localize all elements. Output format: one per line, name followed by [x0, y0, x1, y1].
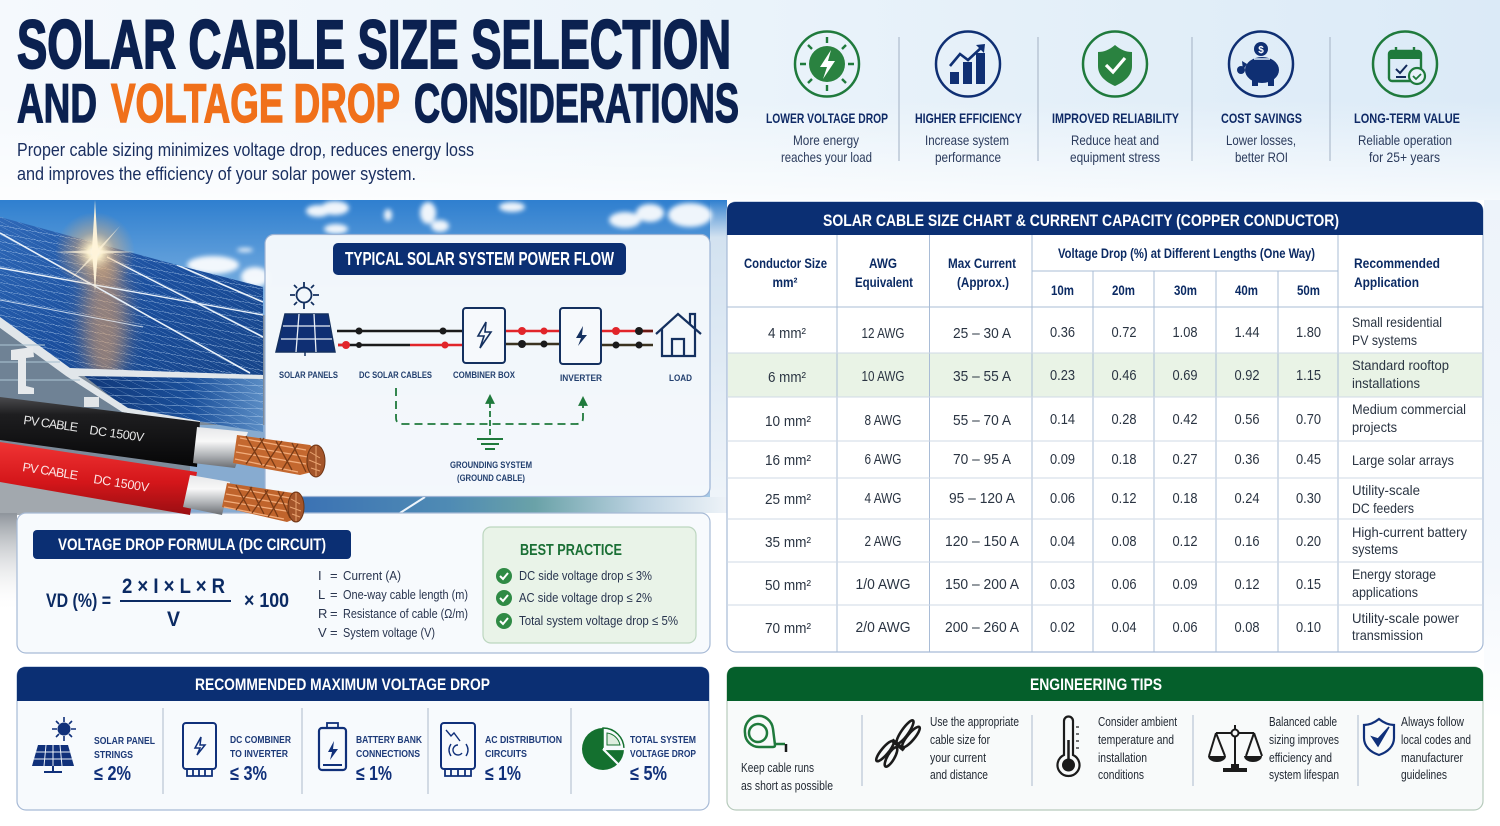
- column headers: (Approx.): [957, 275, 1009, 290]
- benefit: long-term value: LONG-TERM VALUE: [1354, 110, 1460, 126]
- tip: ambient temperature: installation: [1098, 751, 1147, 765]
- benefit: cost savings: better ROI: [1235, 149, 1288, 165]
- best practice box: BEST PRACTICE: [520, 542, 622, 559]
- row: 10 mm²: 0.28: [1112, 412, 1136, 428]
- row: 70 mm²: 0.08: [1234, 620, 1260, 636]
- item: solar panel strings: STRINGS: [94, 749, 133, 761]
- row: 4 mm²: PV systems: [1352, 332, 1417, 348]
- item: dc combiner to inverter: [183, 723, 291, 785]
- item: battery bank connections: CONNECTIONS: [356, 748, 420, 760]
- tip: balanced scales: sizing improves: [1269, 733, 1339, 747]
- label: grounding system: (GROUND CABLE): [457, 473, 525, 484]
- tip: balanced scales: Balanced cable: [1269, 715, 1337, 729]
- formula: 2 × I × L × R: [122, 575, 225, 598]
- cable label: black: DC 1500V: [89, 423, 146, 445]
- row: 16 mm²: 0.45: [1296, 452, 1321, 468]
- row: 35 mm²: 0.16: [1234, 534, 1260, 550]
- row: 70 mm²: 0.10: [1296, 620, 1321, 636]
- row: 4 mm²: Small residential: [1352, 314, 1442, 330]
- photo: solar panels and sky: [0, 200, 727, 613]
- row: 35 mm²: [765, 524, 1467, 557]
- heading: engineering tips: ENGINEERING TIPS: [1030, 675, 1162, 694]
- subtitle: Proper cable sizing minimizes voltage drop, reduces energy loss: [17, 139, 474, 160]
- row: 16 mm²: [765, 452, 1454, 469]
- item: solar panel strings: SOLAR PANEL: [94, 735, 155, 747]
- row: 25 mm²: 0.06: [1050, 491, 1075, 507]
- formula: × 100: [244, 590, 289, 612]
- column headers: Equivalent: [855, 275, 913, 290]
- tip: ambient temperature: [1058, 715, 1177, 782]
- row: 4 mm²: 12 AWG: [862, 326, 904, 342]
- tip: appropriate cable size: your current: [930, 751, 986, 765]
- item: ac distribution circuits: AC DISTRIBUTION: [485, 734, 562, 746]
- item: solar panel strings: ≤ 2%: [94, 763, 131, 785]
- item: solar panel strings: [32, 717, 155, 785]
- row: 10 mm²: Medium commercial: [1352, 401, 1466, 417]
- panel: recommended maximum voltage drop: [17, 667, 709, 810]
- row: 25 mm²: 0.24: [1234, 491, 1260, 507]
- row: 6 mm²: 10 AWG: [862, 369, 904, 385]
- formula legend: Current (A): [343, 568, 401, 583]
- row: 10 mm²: 8 AWG: [864, 413, 902, 429]
- panel: typical solar system power flow: [265, 234, 710, 496]
- row: 25 mm²: 0.18: [1172, 491, 1198, 507]
- icon: house load: LOAD: [669, 373, 692, 384]
- row: 10 mm²: projects: [1352, 419, 1397, 435]
- row: 35 mm²: systems: [1352, 541, 1398, 557]
- row: 6 mm²: 6 mm²: [768, 370, 806, 386]
- column headers: [744, 246, 1440, 298]
- row: 35 mm²: 2 AWG: [864, 534, 902, 550]
- benefit: improved reliability: [1052, 32, 1180, 165]
- formula legend: One-way cable length (m): [343, 587, 468, 602]
- benefit: cost savings: Lower losses,: [1226, 132, 1296, 148]
- tip: codes and guidelines: local codes and: [1401, 733, 1471, 747]
- item: battery bank connections: [319, 723, 422, 785]
- cable label: black: [23, 413, 146, 445]
- row: 6 mm²: [768, 357, 1449, 391]
- heading: formula: VOLTAGE DROP FORMULA (DC CIRCUIT): [58, 535, 326, 554]
- row: 70 mm²: 0.04: [1112, 620, 1136, 636]
- benefit: lower voltage drop: reaches your load: [781, 149, 872, 165]
- best practice box: [483, 527, 696, 643]
- row: 25 mm²: 0.12: [1112, 491, 1136, 507]
- subtitle: and improves the efficiency of your solar power system.: [17, 163, 416, 184]
- icon: inverter: INVERTER: [560, 373, 602, 384]
- label: SOLAR PANELS: [279, 370, 338, 381]
- item: total system voltage drop: [582, 728, 696, 785]
- benefit: higher efficiency: HIGHER EFFICIENCY: [915, 110, 1022, 126]
- tip: short cable runs: Keep cable runs: [741, 761, 814, 775]
- benefit: lower voltage drop: [766, 32, 888, 165]
- heading: power flow: TYPICAL SOLAR SYSTEM POWER FLOW: [345, 249, 614, 269]
- column headers: mm²: [772, 275, 798, 290]
- column headers: AWG: [869, 256, 897, 271]
- formula legend: System voltage (V): [343, 625, 435, 640]
- title: SOLAR CABLE SIZE SELECTION: [17, 6, 731, 83]
- chart header: SOLAR CABLE SIZE CHART & CURRENT CAPACITY (COPPER CONDUCTOR): [823, 211, 1339, 230]
- row: 25 mm²: DC feeders: [1352, 500, 1414, 516]
- title: [17, 6, 739, 134]
- cable label: red: [22, 460, 151, 495]
- item: total system voltage drop: ≤ 5%: [630, 763, 667, 785]
- benefit: long-term value: for 25+ years: [1369, 149, 1440, 165]
- row: 4 mm²: 1.08: [1172, 325, 1198, 341]
- cable label: red: DC 1500V: [93, 472, 151, 495]
- row: 16 mm²: 0.09: [1050, 452, 1075, 468]
- benefit: higher efficiency: performance: [935, 149, 1001, 165]
- row: 4 mm²: 1.80: [1296, 325, 1321, 341]
- tip: appropriate cable size: and distance: [930, 768, 988, 782]
- row: 50 mm²: [765, 566, 1436, 600]
- row: 70 mm²: 2/0 AWG: [856, 620, 910, 636]
- grey area below cables: [0, 480, 195, 613]
- panel: engineering tips: [727, 667, 1483, 810]
- tip: short cable runs: [741, 716, 833, 793]
- heading: formula: [33, 530, 351, 559]
- wires: [337, 327, 653, 349]
- row: 10 mm²: 10 mm²: [765, 414, 811, 430]
- row: 16 mm²: 6 AWG: [864, 452, 902, 468]
- column headers: Recommended: [1354, 256, 1440, 271]
- row: 10 mm²: 0.70: [1296, 412, 1321, 428]
- formula: V: [167, 608, 180, 631]
- row: 50 mm²: 0.12: [1234, 577, 1260, 593]
- row: 70 mm²: 0.06: [1172, 620, 1198, 636]
- item: dc combiner to inverter: DC COMBINER: [230, 734, 291, 746]
- benefit: improved reliability: Reduce heat and: [1071, 132, 1159, 148]
- row: 25 mm²: [765, 482, 1420, 516]
- item: total system voltage drop: VOLTAGE DROP: [630, 748, 696, 760]
- row: 6 mm²: 0.69: [1172, 368, 1198, 384]
- row: 4 mm²: 4 mm²: [768, 326, 806, 342]
- label: dc solar cables: DC SOLAR CABLES: [359, 370, 432, 381]
- column headers: Conductor Size: [744, 256, 827, 271]
- row: 25 mm²: 0.30: [1296, 491, 1321, 507]
- best practice box: DC side voltage drop ≤ 3%: [519, 568, 652, 583]
- item: ac distribution circuits: [441, 723, 562, 785]
- row: 50 mm²: 0.09: [1172, 577, 1198, 593]
- tip: appropriate cable size: [874, 715, 1019, 782]
- row: 50 mm²: 50 mm²: [765, 578, 811, 594]
- best practice box: AC side voltage drop ≤ 2%: [519, 590, 652, 605]
- heading: recommended: RECOMMENDED MAXIMUM VOLTAGE DROP: [195, 675, 490, 694]
- row: 4 mm²: [768, 314, 1442, 348]
- row: 35 mm²: High-current battery: [1352, 524, 1467, 540]
- benefit: higher efficiency: Increase system: [925, 132, 1009, 148]
- column headers: 10m: [1051, 283, 1074, 298]
- row: 70 mm²: [765, 610, 1459, 643]
- heading: power flow: [333, 243, 626, 275]
- label: grounding system: GROUNDING SYSTEM: [450, 460, 532, 471]
- item: battery bank connections: ≤ 1%: [356, 763, 392, 785]
- row: 70 mm²: Utility-scale power: [1352, 610, 1459, 626]
- item: ac distribution circuits: CIRCUITS: [485, 748, 527, 760]
- icon: combiner box: COMBINER BOX: [453, 370, 516, 381]
- row: 6 mm²: 0.92: [1234, 368, 1260, 384]
- sky with clouds: [0, 200, 727, 513]
- heading: engineering tips: [727, 667, 1483, 701]
- red PV cable: [0, 442, 304, 522]
- row: 35 mm²: 120 – 150 A: [945, 534, 1019, 550]
- item: total system voltage drop: TOTAL SYSTEM: [630, 734, 696, 746]
- column headers: 30m: [1174, 283, 1197, 298]
- row: 6 mm²: 0.23: [1050, 368, 1075, 384]
- row: 10 mm²: 0.14: [1050, 412, 1075, 428]
- formula legend: =: [330, 568, 338, 583]
- benefit: improved reliability: equipment stress: [1070, 149, 1160, 165]
- panel: cable size chart: [727, 202, 1483, 652]
- item: dc combiner to inverter: TO INVERTER: [230, 748, 288, 760]
- row: 50 mm²: Energy storage: [1352, 566, 1436, 582]
- heading: recommended: [17, 667, 709, 701]
- benefit: cost savings: COST SAVINGS: [1221, 110, 1302, 126]
- item: battery bank connections: BATTERY BANK: [356, 734, 422, 746]
- row: 70 mm²: transmission: [1352, 627, 1423, 643]
- formula legend: [318, 568, 468, 640]
- row: 35 mm²: 0.20: [1296, 534, 1321, 550]
- item: dc combiner to inverter: ≤ 3%: [230, 763, 267, 785]
- formula legend: V: [318, 625, 327, 640]
- icon: house load: [656, 314, 701, 384]
- black PV cable: [0, 397, 325, 477]
- row: 70 mm²: 200 – 260 A: [945, 620, 1019, 636]
- tip: appropriate cable size: cable size for: [930, 733, 990, 747]
- column headers: 40m: [1235, 283, 1258, 298]
- grounding lines: [396, 388, 586, 449]
- benefit: lower voltage drop: LOWER VOLTAGE DROP: [766, 110, 888, 126]
- row: 25 mm²: 4 AWG: [864, 491, 902, 507]
- chart header: [727, 202, 1483, 235]
- row: 50 mm²: applications: [1352, 584, 1418, 600]
- best practice box: Total system voltage drop ≤ 5%: [519, 613, 678, 628]
- row: 16 mm²: 0.36: [1234, 452, 1260, 468]
- tip: short cable runs: as short as possible: [741, 779, 833, 793]
- tip: codes and guidelines: Always follow: [1401, 715, 1465, 729]
- formula legend: Resistance of cable (Ω/m): [343, 606, 468, 621]
- formula legend: =: [330, 606, 338, 621]
- formula: [46, 575, 289, 631]
- PV cables photo overlay: [0, 397, 325, 522]
- row: 6 mm²: Standard rooftop: [1352, 357, 1449, 373]
- row: 50 mm²: 0.06: [1112, 577, 1136, 593]
- formula legend: =: [330, 625, 338, 640]
- row: 35 mm²: 0.04: [1050, 534, 1075, 550]
- highlighted row: [728, 353, 1482, 397]
- column headers: 20m: [1112, 283, 1135, 298]
- row: 10 mm²: 55 – 70 A: [953, 413, 1011, 429]
- column headers: Max Current: [948, 256, 1016, 271]
- column headers: 50m: [1297, 283, 1320, 298]
- title: CONSIDERATIONS: [414, 72, 739, 134]
- formula legend: L: [318, 587, 325, 602]
- panel: voltage drop formula: [17, 513, 710, 653]
- row: 10 mm²: 0.42: [1172, 412, 1198, 428]
- row: 25 mm²: 25 mm²: [765, 492, 811, 508]
- row: 6 mm²: installations: [1352, 375, 1420, 391]
- formula: VD (%) =: [46, 591, 111, 612]
- row: 16 mm²: 0.18: [1112, 452, 1136, 468]
- row: 10 mm²: [765, 401, 1466, 435]
- icon: combiner box: [453, 308, 516, 381]
- solar panel array: [0, 217, 266, 513]
- benefit: long-term value: [1354, 32, 1460, 165]
- row: 70 mm²: 70 mm²: [765, 621, 811, 637]
- row: 50 mm²: 0.03: [1050, 577, 1075, 593]
- row: 10 mm²: 0.56: [1234, 412, 1260, 428]
- row: 50 mm²: 150 – 200 A: [945, 577, 1019, 593]
- benefits row: [766, 32, 1460, 165]
- row: 6 mm²: 1.15: [1296, 368, 1321, 384]
- benefit: lower voltage drop: More energy: [793, 132, 859, 148]
- formula legend: =: [330, 587, 338, 602]
- tip: codes and guidelines: manufacturer: [1401, 751, 1463, 765]
- row: 4 mm²: 0.72: [1112, 325, 1136, 341]
- sun glare: [55, 200, 135, 292]
- row: 25 mm²: Utility-scale: [1352, 482, 1420, 498]
- column headers: Voltage Drop (%) at Different Lengths (One Way): [1058, 246, 1315, 261]
- tip: balanced scales: [1208, 715, 1339, 782]
- benefit: cost savings: $: [1258, 45, 1264, 56]
- row: 4 mm²: 1.44: [1234, 325, 1260, 341]
- row: 35 mm²: 35 mm²: [765, 535, 811, 551]
- tip: codes and guidelines: [1364, 715, 1471, 782]
- benefit: higher efficiency: [915, 32, 1022, 165]
- icon: sun and solar panel: [276, 282, 338, 381]
- row: 16 mm²: 70 – 95 A: [953, 452, 1011, 468]
- subtitle: [17, 139, 474, 184]
- row: 35 mm²: 0.08: [1112, 534, 1136, 550]
- row: 4 mm²: 25 – 30 A: [953, 326, 1011, 342]
- title: AND: [17, 72, 97, 134]
- formula legend: I: [318, 568, 322, 583]
- row: 16 mm²: 0.27: [1172, 452, 1198, 468]
- label: grounding system: [450, 460, 532, 484]
- row: 35 mm²: 0.12: [1172, 534, 1198, 550]
- tip: ambient temperature: Consider ambient: [1098, 715, 1177, 729]
- item: ac distribution circuits: ≤ 1%: [485, 763, 521, 785]
- benefit: cost savings: [1221, 32, 1302, 165]
- cable label: red: PV CABLE: [22, 460, 79, 483]
- row: 16 mm²: 16 mm²: [765, 453, 811, 469]
- row: 25 mm²: 95 – 120 A: [949, 491, 1015, 507]
- column headers: Application: [1354, 275, 1419, 290]
- tip: balanced scales: system lifespan: [1269, 768, 1339, 782]
- row: 50 mm²: 0.15: [1296, 577, 1321, 593]
- tip: ambient temperature: conditions: [1098, 768, 1144, 782]
- row: 6 mm²: 0.46: [1112, 368, 1136, 384]
- cable label: black: PV CABLE: [23, 413, 79, 435]
- formula legend: R: [318, 606, 327, 621]
- row: 70 mm²: 0.02: [1050, 620, 1075, 636]
- icon: inverter: [560, 308, 602, 384]
- row: 16 mm²: Large solar arrays: [1352, 452, 1454, 468]
- benefit: improved reliability: IMPROVED RELIABILITY: [1052, 110, 1180, 126]
- tip: appropriate cable size: Use the appropriate: [930, 715, 1019, 729]
- tip: ambient temperature: temperature and: [1098, 733, 1174, 747]
- row: 50 mm²: 1/0 AWG: [856, 577, 910, 593]
- title: VOLTAGE DROP: [111, 72, 400, 134]
- row: 6 mm²: 35 – 55 A: [953, 369, 1011, 385]
- tip: balanced scales: efficiency and: [1269, 751, 1332, 765]
- tip: codes and guidelines: guidelines: [1401, 768, 1447, 782]
- benefit: long-term value: Reliable operation: [1358, 132, 1452, 148]
- row: 4 mm²: 0.36: [1050, 325, 1075, 341]
